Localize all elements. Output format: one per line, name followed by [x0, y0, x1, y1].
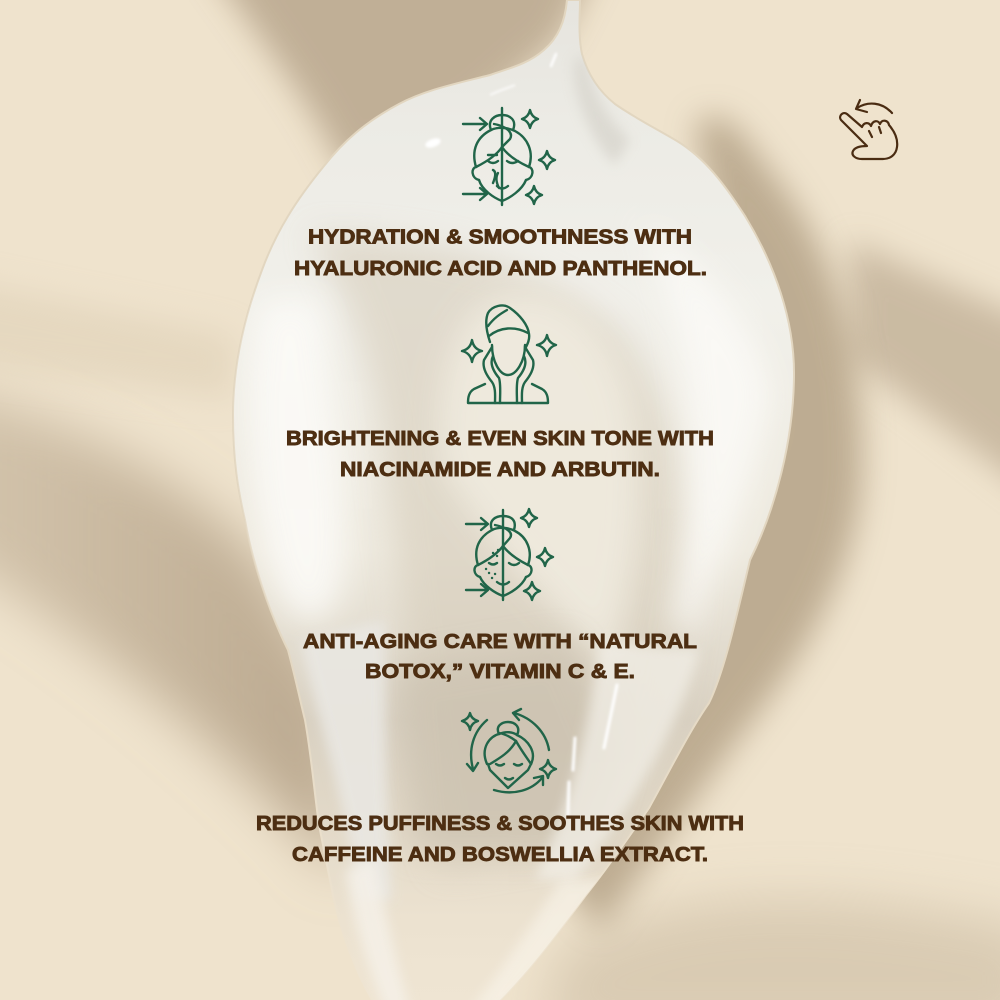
text: anti-aging: BOTOX,” VITAMIN C & E.	[365, 660, 635, 683]
icon: woman with turban	[462, 306, 556, 403]
text: brightening: NIACINAMIDE AND ARBUTIN.	[340, 458, 660, 481]
benefit 4: puffiness	[256, 709, 744, 866]
cream swatch	[233, 0, 794, 1000]
text: puffiness: CAFFEINE AND BOSWELLIA EXTRACT.	[292, 843, 708, 866]
text: brightening	[286, 427, 714, 481]
benefit 2: brightening	[286, 306, 714, 481]
text: anti-aging: ANTI-AGING CARE WITH “NATURAL	[303, 630, 697, 653]
text: puffiness: REDUCES PUFFINESS & SOOTHES SKIN WITH	[256, 812, 744, 835]
text: anti-aging	[303, 630, 697, 683]
text: hydration: HYDRATION & SMOOTHNESS WITH	[308, 226, 692, 248]
text: puffiness	[256, 812, 744, 866]
benefit 1: hydration	[294, 108, 707, 280]
text: hydration	[294, 226, 707, 280]
benefit 3: anti-aging	[303, 509, 697, 683]
icon: swipe hand	[840, 100, 897, 159]
icon: half face with blemishes	[466, 509, 553, 600]
text: hydration: HYALURONIC ACID AND PANTHENOL.	[294, 257, 707, 280]
icon: half face with arrows and sparkles	[463, 108, 555, 205]
text: brightening: BRIGHTENING & EVEN SKIN TONE WITH	[286, 427, 714, 450]
icon: face with circular arrows	[462, 709, 556, 792]
